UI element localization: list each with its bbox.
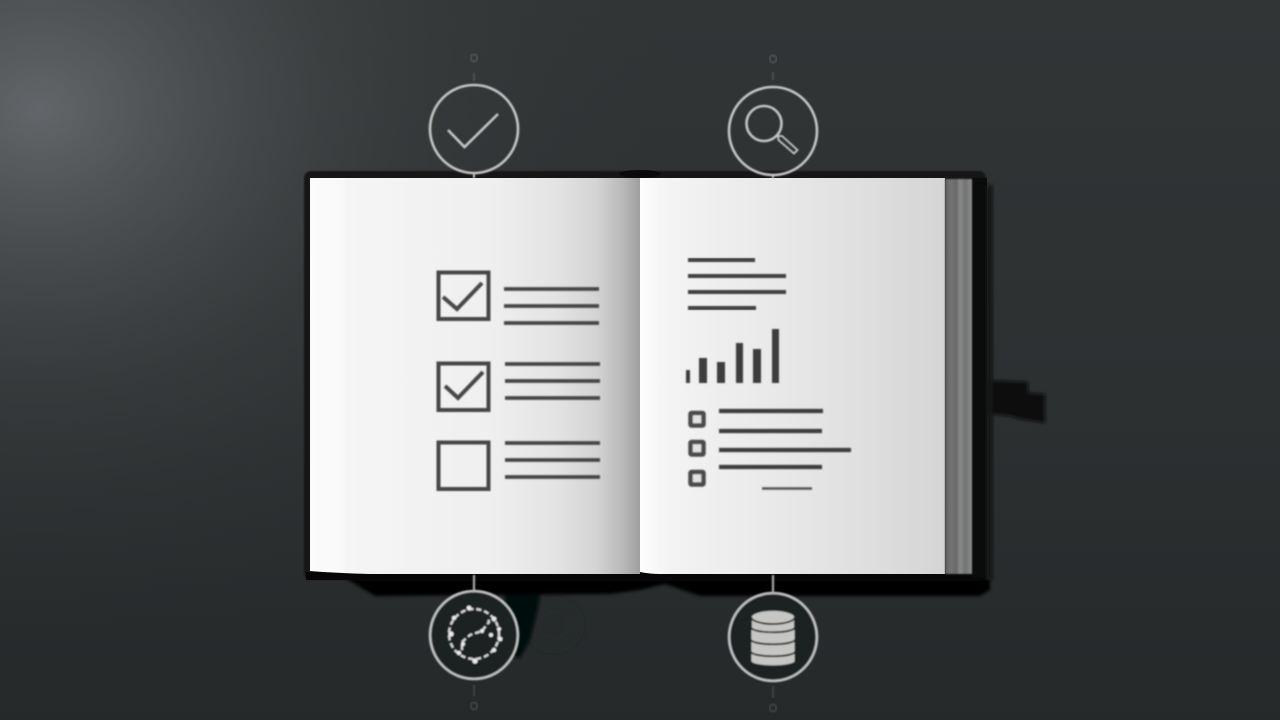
icon: node network in circle bbox=[430, 575, 518, 679]
bullet lines bbox=[719, 411, 851, 488]
cover right band bbox=[972, 178, 987, 578]
connector: top right terminal bbox=[770, 56, 776, 80]
checklist bbox=[438, 272, 600, 489]
bullet list bbox=[690, 411, 851, 488]
notebook bbox=[304, 170, 993, 596]
book drop shadow bbox=[345, 578, 990, 596]
checklist item 1 bbox=[438, 272, 599, 323]
checklist item 2 bbox=[438, 364, 600, 410]
cover lower band bbox=[306, 572, 986, 580]
connector: top left terminal bbox=[470, 54, 478, 81]
notebook bookmark tab bbox=[982, 380, 1045, 423]
right page bbox=[640, 178, 945, 574]
icon: database in circle bbox=[729, 575, 817, 681]
cover outer shadow bbox=[986, 185, 993, 580]
left page bbox=[310, 178, 640, 574]
checklist item 3 bbox=[438, 442, 600, 489]
page block edge bbox=[945, 179, 972, 574]
bar chart bbox=[686, 329, 779, 383]
connector: bottom left terminal bbox=[470, 685, 478, 710]
bullet squares bbox=[690, 413, 704, 484]
icon: magnifying glass in circle bbox=[729, 87, 817, 178]
spine notch bbox=[619, 170, 661, 178]
icon: check mark in circle bbox=[430, 85, 518, 178]
book cover bbox=[304, 171, 986, 580]
ribbon shadow under book bbox=[505, 590, 578, 658]
connector: bottom right terminal bbox=[770, 686, 776, 712]
text lines block bbox=[688, 260, 786, 308]
